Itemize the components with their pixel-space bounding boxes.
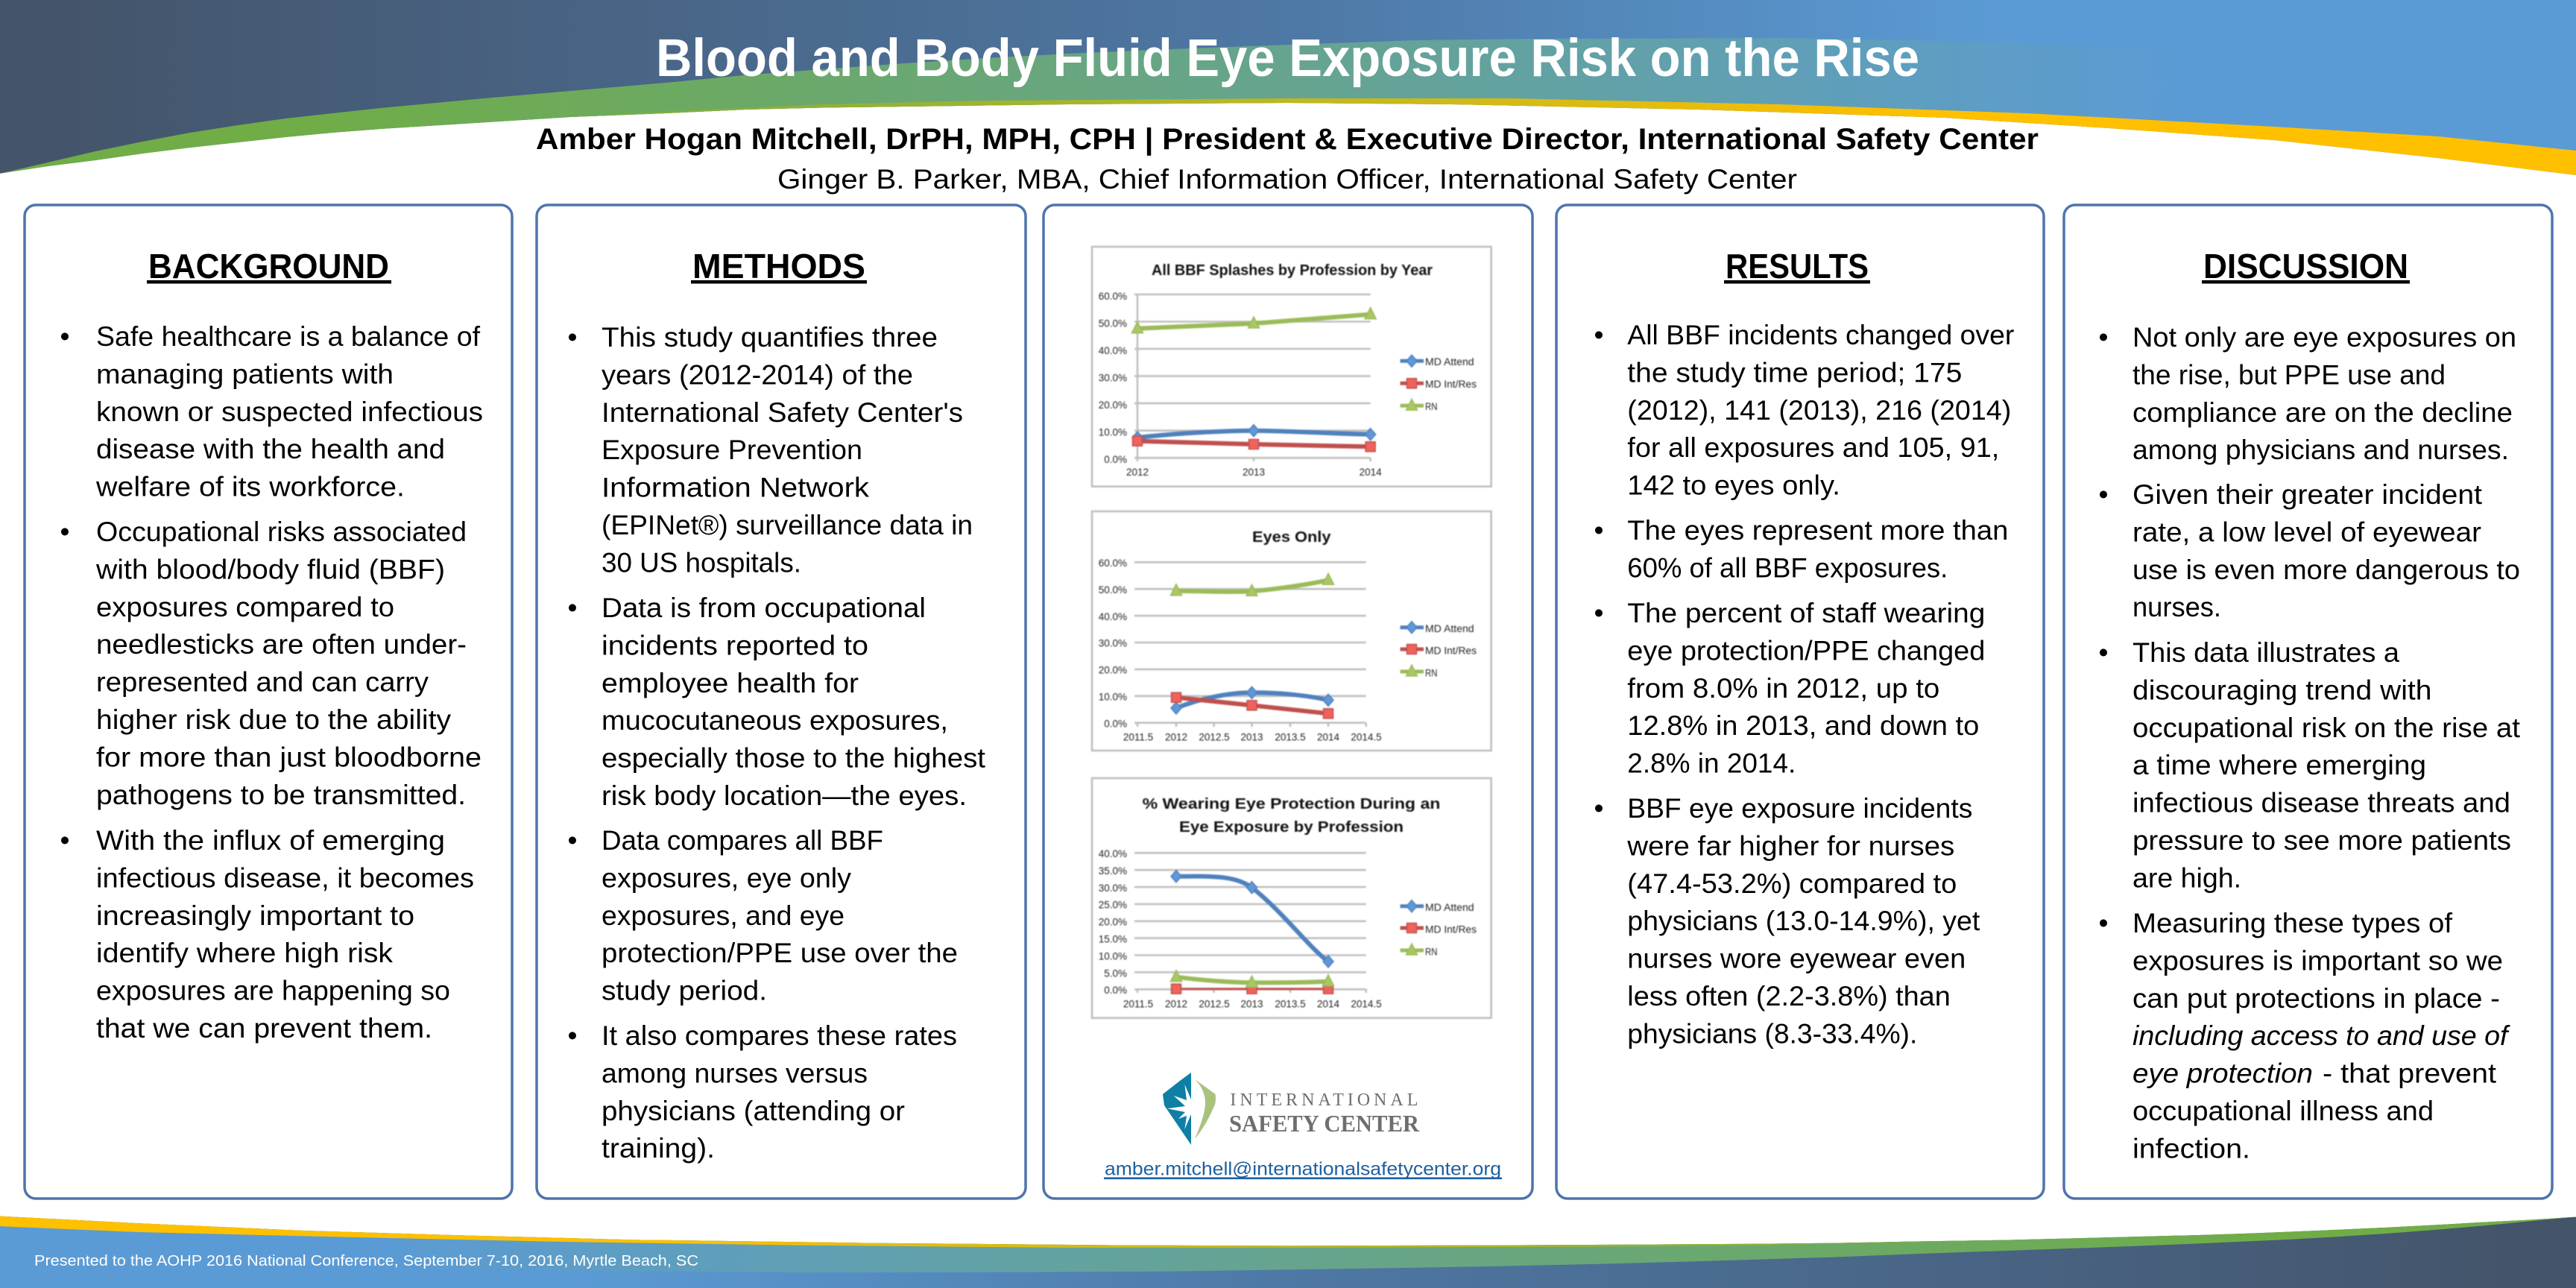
bullet: danger to nurses: • <box>2099 479 2108 510</box>
legend: RN <box>1425 401 1437 412</box>
bullet: emerging infectious disease: that we can prevent them. <box>96 1013 432 1044</box>
x axis labels: 2012.5 <box>1199 999 1230 1010</box>
bullet: measuring exposures: occupational illness and <box>2133 1096 2434 1126</box>
bullet: discouraging trend <box>2099 637 2521 893</box>
y axis labels: 20.0% <box>1099 917 1127 928</box>
y axis labels <box>1099 291 1127 465</box>
bullet: eye protection percent <box>1594 598 1985 779</box>
series: MD Int/Res <box>1172 984 1333 994</box>
bullet: measuring exposures: • <box>2099 908 2108 938</box>
chart title: All BBF Splashes by Profession by Year <box>1152 262 1433 279</box>
series: RN <box>1170 970 1334 987</box>
bullet: nurses compared to physicians: (47.4-53.2%) compared to <box>1627 868 1957 899</box>
bullet: measuring exposures: exposures is important so we <box>2133 945 2503 976</box>
bullet: occupational risks: exposures compared to <box>96 592 394 622</box>
bullet: eyes share: • <box>1594 515 1603 546</box>
bullet: study scope: 30 US hospitals. <box>602 547 801 578</box>
bullet: eye protection percent: 12.8% in 2013, and down to <box>1627 710 1979 741</box>
series: MD Attend <box>1171 686 1333 714</box>
chart: eyes only <box>1092 511 1491 751</box>
panel: charts and logo <box>1044 205 1532 1199</box>
x axis labels: 2013.5 <box>1275 999 1306 1010</box>
series: RN <box>1131 308 1376 333</box>
bullet: data source: especially those to the highest <box>602 743 986 774</box>
bullet: discouraging trend: pressure to see more patients <box>2133 825 2511 856</box>
series: MD Attend <box>1171 871 1333 967</box>
y axis labels: 40.0% <box>1099 611 1127 622</box>
bullet: study scope: • <box>568 322 577 353</box>
bullet: nurses compared to physicians: physicians (8.3-33.4%). <box>1627 1018 1917 1049</box>
bullet: safe healthcare: managing patients with <box>96 359 394 389</box>
bullet: occupational risks: needlesticks are often under- <box>96 629 467 660</box>
chart title: % Wearing Eye Protection During an <box>1143 796 1440 812</box>
bullet: nurses compared to physicians: BBF eye exposure incidents <box>1627 793 1972 824</box>
y axis labels: 5.0% <box>1104 967 1127 979</box>
bullet: danger to nurses: Given their greater incident <box>2133 479 2483 510</box>
bullet: measuring exposures <box>2099 908 2510 1164</box>
bullet: measuring exposures: - that prevent <box>2323 1058 2497 1089</box>
bullet: study scope: This study quantifies three <box>602 322 938 353</box>
x axis labels: 2012 <box>1165 999 1187 1010</box>
bullet: discouraging trend: a time where emerging <box>2133 750 2426 780</box>
y axis labels: 15.0% <box>1099 933 1127 945</box>
bullet: incident counts: the study time period; 175 <box>1627 357 1962 388</box>
y axis labels: 20.0% <box>1099 665 1127 676</box>
bullet: nurses versus physicians: • <box>568 1020 577 1051</box>
bullet: incident counts: for all exposures and 105, 91, <box>1627 432 1999 463</box>
bullet: eye exposures rising: • <box>2099 322 2108 353</box>
bullet: safe healthcare: known or suspected infectious <box>96 397 483 427</box>
legend: MD Int/Res <box>1425 379 1477 390</box>
x axis labels: 2013 <box>1240 999 1263 1010</box>
legend: MD Int/Res <box>1425 924 1477 935</box>
x axis labels: 2012 <box>1165 731 1187 742</box>
x axis labels: 2012 <box>1126 467 1149 478</box>
bullet: nurses compared to physicians: physicians (13.0-14.9%), yet <box>1627 906 1980 936</box>
bullet: danger to nurses <box>2099 479 2520 622</box>
bullet: data source: Data is from occupational <box>602 593 926 623</box>
bullet: data source: • <box>568 593 577 623</box>
bullet: nurses compared to physicians: • <box>1594 793 1603 824</box>
x axis labels <box>1126 467 1382 478</box>
y axis labels: 40.0% <box>1099 848 1127 859</box>
chart: all BBF splashes by profession by year <box>1092 247 1491 487</box>
legend: RN <box>1425 668 1437 678</box>
bullet: data comparisons: protection/PPE use over the <box>602 938 958 968</box>
bullet: data comparisons <box>568 825 958 1006</box>
series: RN <box>1170 573 1334 596</box>
bullet: discouraging trend: discouraging trend with <box>2133 675 2431 705</box>
chart title: Eyes Only <box>1252 529 1331 546</box>
y axis labels: 20.0% <box>1099 400 1127 411</box>
chart: percent wearing eye protection <box>1092 778 1491 1018</box>
y axis labels: 25.0% <box>1099 900 1127 911</box>
bullet: nurses compared to physicians: were far higher for nurses <box>1626 830 1954 861</box>
bullet: discouraging trend: This data illustrates a <box>2133 637 2399 668</box>
bullet: data comparisons: study period. <box>602 976 767 1006</box>
bullet: safe healthcare: welfare of its workforce. <box>95 472 405 502</box>
y axis labels: 50.0% <box>1099 584 1127 596</box>
series: MD Int/Res <box>1133 436 1375 452</box>
bullet: emerging infectious disease: identify where high risk <box>96 938 394 968</box>
bullet: discouraging trend: infectious disease threats and <box>2133 788 2510 818</box>
bullet: emerging infectious disease: infectious disease, it becomes <box>96 862 474 893</box>
y axis labels: 35.0% <box>1099 865 1127 877</box>
bullet: data source: employee health for <box>602 668 859 698</box>
y axis labels: 10.0% <box>1099 426 1127 438</box>
bullet: study scope: years (2012-2014) of the <box>602 359 913 390</box>
bullet: safe healthcare: • <box>60 321 69 352</box>
y axis labels <box>1099 558 1127 729</box>
chart title: Eye Exposure by Profession <box>1179 819 1404 836</box>
x axis labels <box>1123 731 1382 742</box>
bullet: nurses compared to physicians: nurses wore eyewear even <box>1627 944 1966 974</box>
bullet: discouraging trend: occupational risk on the rise at <box>2133 713 2521 743</box>
bullet: incident counts: 142 to eyes only. <box>1627 470 1840 501</box>
bullet: incident counts: (2012), 141 (2013), 216 (2014) <box>1627 395 2011 426</box>
bullet: eyes share <box>1594 515 2008 583</box>
legend: RN <box>1425 947 1437 957</box>
bullet: emerging infectious disease: increasingly important to <box>96 900 414 931</box>
bullet: emerging infectious disease: exposures are happening so <box>96 976 450 1006</box>
icon: International Safety Center logo: SAFETY CENTER <box>1229 1110 1420 1137</box>
bullet: incident counts: All BBF incidents changed over <box>1627 320 2014 350</box>
bullet: occupational risks: represented and can carry <box>96 667 429 698</box>
bullet: eye protection percent: eye protection/PPE changed <box>1627 635 1985 666</box>
bullet: measuring exposures: eye protection <box>2133 1058 2313 1089</box>
panel: background <box>25 205 512 1199</box>
bullet: study scope: Exposure Prevention <box>602 435 862 465</box>
x axis labels: 2014 <box>1317 999 1340 1010</box>
y axis labels: 40.0% <box>1099 345 1127 356</box>
bullet: study scope: International Safety Center's <box>602 397 963 428</box>
bullet: nurses versus physicians: among nurses versus <box>602 1058 868 1088</box>
x axis labels: 2014 <box>1317 731 1340 742</box>
co-author line: Ginger B. Parker, MBA, Chief Information Officer, International Safety Center <box>777 164 1797 195</box>
y axis labels: 50.0% <box>1099 318 1127 329</box>
y axis labels: 30.0% <box>1099 883 1127 894</box>
bullet: occupational risks: pathogens to be transmitted. <box>96 780 466 810</box>
bullet: incident counts <box>1594 320 2014 501</box>
bullet: safe healthcare: Safe healthcare is a balance of <box>96 321 481 352</box>
bullet: eye protection percent: 2.8% in 2014. <box>1627 748 1796 779</box>
legend: MD Attend <box>1425 902 1474 913</box>
bullet: nurses versus physicians: It also compares these rates <box>602 1020 957 1051</box>
bullet: data comparisons: Data compares all BBF <box>602 825 883 856</box>
bullet: data source: mucocutaneous exposures, <box>602 705 948 736</box>
panel: discussion <box>2064 205 2552 1199</box>
bullet: measuring exposures: including access to and use of <box>2133 1020 2510 1051</box>
bullet: nurses versus physicians: training). <box>602 1133 715 1164</box>
bullet: occupational risks: • <box>60 517 69 547</box>
legend: MD Int/Res <box>1425 645 1477 656</box>
bullet: occupational risks: for more than just bloodborne <box>96 742 482 772</box>
bullet: emerging infectious disease: With the influx of emerging <box>96 825 445 856</box>
y axis labels: 30.0% <box>1099 373 1127 383</box>
bullet: eye exposures rising: Not only are eye exposures on <box>2133 322 2516 353</box>
y axis labels: 0.0% <box>1104 985 1127 996</box>
y axis labels: 60.0% <box>1099 558 1127 569</box>
bullet: measuring exposures: infection. <box>2133 1133 2250 1164</box>
legend: MD Attend <box>1425 623 1474 634</box>
y axis labels: 10.0% <box>1099 692 1127 702</box>
x axis labels <box>1123 999 1382 1010</box>
bullet: data source <box>568 593 986 811</box>
bullet: emerging infectious disease: • <box>60 825 69 856</box>
legend <box>1400 622 1477 678</box>
lead author line: Amber Hogan Mitchell, DrPH, MPH, CPH | President & Executive Director, International Safety Center <box>536 123 2039 156</box>
bullet: eye exposures rising: the rise, but PPE use and <box>2133 359 2446 390</box>
x axis labels: 2011.5 <box>1123 731 1153 742</box>
bullet: discouraging trend: • <box>2099 637 2108 668</box>
x axis labels: 2011.5 <box>1123 999 1153 1010</box>
bullet: emerging infectious disease <box>60 825 474 1044</box>
bullet: nurses compared to physicians: less often (2.2-3.8%) than <box>1627 981 1951 1011</box>
x axis labels: 2012.5 <box>1199 731 1230 742</box>
bullet: data source: incidents reported to <box>602 630 868 660</box>
bullet: study scope <box>568 322 973 578</box>
y axis labels: 0.0% <box>1104 454 1127 465</box>
bullet: eye exposures rising: compliance are on the decline <box>2133 397 2513 428</box>
legend <box>1400 355 1477 412</box>
icon: International Safety Center logo: INTERNATIONAL <box>1230 1090 1418 1110</box>
series: MD Int/Res <box>1172 692 1333 719</box>
bullet: measuring exposures: can put protections in place - <box>2133 983 2500 1014</box>
y axis labels: 60.0% <box>1099 291 1127 302</box>
bullet: occupational risks <box>60 517 482 810</box>
header swoosh banner <box>0 0 2576 175</box>
y axis labels: 10.0% <box>1099 950 1127 962</box>
bullet: data comparisons: • <box>568 825 577 856</box>
bullet: measuring exposures: Measuring these types of <box>2133 908 2453 938</box>
heading: background: BACKGROUND <box>148 247 389 285</box>
heading: results: RESULTS <box>1726 247 1869 285</box>
bullet: danger to nurses: nurses. <box>2133 592 2221 622</box>
bullet: eye protection percent: • <box>1594 598 1603 628</box>
bullet: eyes share: 60% of all BBF exposures. <box>1627 552 1948 583</box>
legend <box>1400 900 1477 957</box>
bullet: safe healthcare <box>60 321 483 502</box>
bullet: data source: risk body location—the eyes. <box>602 780 967 811</box>
series: MD Attend <box>1132 425 1376 443</box>
bullet: eye exposures rising: among physicians and nurses. <box>2133 435 2509 465</box>
y axis labels: 30.0% <box>1099 638 1127 649</box>
contact email: amber.mitchell@internationalsafetycenter.org <box>1105 1159 1501 1180</box>
x axis labels: 2014 <box>1360 467 1382 478</box>
x axis labels: 2014.5 <box>1351 731 1382 742</box>
bullet: incident counts: • <box>1594 320 1603 350</box>
legend: MD Attend <box>1425 356 1474 367</box>
bullet: nurses versus physicians: physicians (attending or <box>602 1096 905 1126</box>
bullet: safe healthcare: disease with the health and <box>96 434 445 464</box>
x axis labels: 2013 <box>1240 731 1263 742</box>
x axis labels: 2013.5 <box>1275 731 1306 742</box>
bullet: data comparisons: exposures, eye only <box>602 862 851 893</box>
heading: discussion: DISCUSSION <box>2203 247 2408 285</box>
bullet: eye protection percent: from 8.0% in 2012, up to <box>1627 673 1939 704</box>
icon: International Safety Center logo <box>1163 1073 1420 1145</box>
bullet: danger to nurses: rate, a low level of eyewear <box>2133 517 2481 547</box>
bullet: eye exposures rising <box>2099 322 2516 465</box>
panel: results <box>1556 205 2044 1199</box>
title: Blood and Body Fluid Eye Exposure Risk on the Rise <box>656 29 1919 88</box>
bullet: discouraging trend: are high. <box>2133 862 2241 893</box>
y axis labels: 0.0% <box>1104 718 1127 729</box>
bullet: data comparisons: exposures, and eye <box>602 900 845 931</box>
bullet: study scope: (EPINet®) surveillance data in <box>602 510 973 540</box>
bullet: study scope: Information Network <box>602 473 870 503</box>
bullet: eye protection percent: The percent of staff wearing <box>1627 598 1985 628</box>
panel: methods <box>537 205 1026 1199</box>
bullet: occupational risks: Occupational risks associated <box>96 517 467 547</box>
bullet: occupational risks: with blood/body fluid (BBF) <box>95 554 445 584</box>
bullet: nurses versus physicians <box>568 1020 957 1164</box>
heading: methods: METHODS <box>692 247 865 285</box>
bullet: danger to nurses: use is even more dangerous to <box>2133 555 2520 585</box>
bullet: nurses compared to physicians <box>1594 793 1980 1049</box>
footer conference note: Presented to the AOHP 2016 National Conference, September 7-10, 2016, Myrtle Beach, SC <box>34 1253 698 1269</box>
y axis labels <box>1099 848 1127 996</box>
chart title <box>1143 796 1440 836</box>
bullet: occupational risks: higher risk due to the ability <box>96 704 452 735</box>
x axis labels: 2013 <box>1243 467 1265 478</box>
bullet: eyes share: The eyes represent more than <box>1627 515 2008 546</box>
x axis labels: 2014.5 <box>1351 999 1382 1010</box>
footer swoosh banner <box>0 1216 2576 1288</box>
